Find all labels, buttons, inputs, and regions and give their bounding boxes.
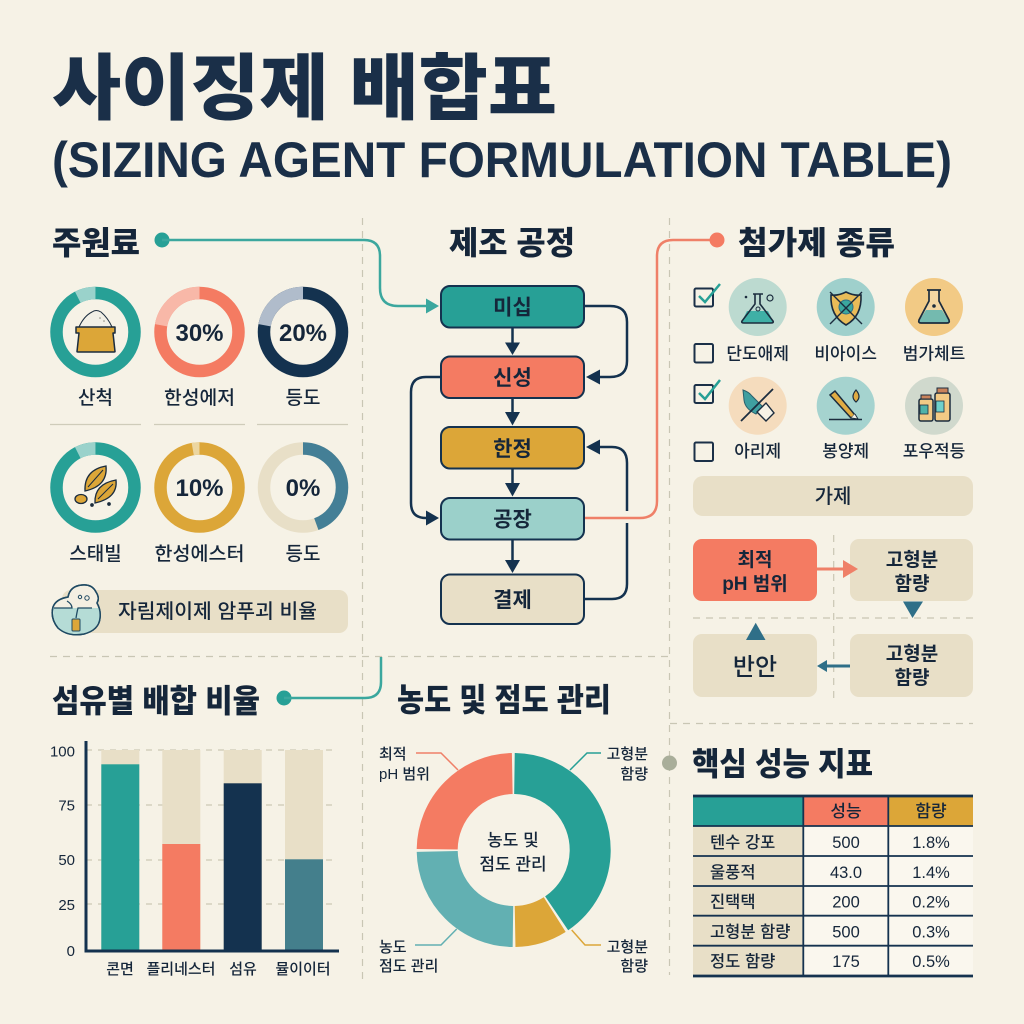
box: solids content bottom (850, 634, 973, 697)
row: solids content: 고형분 함량 (710, 922, 790, 942)
bar: polymer (285, 750, 323, 950)
donut: starch with leaf icon: 스태빌 (69, 543, 122, 565)
checkboxes (694, 284, 720, 461)
bar chart: blend ratio (50, 741, 339, 978)
labels: additive row one: 비아이스 (814, 344, 877, 364)
flow arrowheads (426, 342, 600, 573)
donut chart: concentration and viscosity (379, 745, 648, 975)
callout: self-emulsifier ratio: 자림제이제 암푸괴 비율 (118, 600, 317, 623)
table header (830, 802, 947, 821)
row: solids content: 0.3% (912, 924, 950, 942)
table: key performance (693, 796, 973, 976)
callout: self-emulsifier ratio (52, 585, 348, 635)
row: gloss (710, 892, 950, 912)
row: coverage: 1.4% (912, 864, 950, 882)
donut: 0 percent: 등도 (286, 544, 320, 565)
bar: polyester (162, 750, 200, 950)
label: optimal pH: pH 범위 (379, 766, 430, 783)
step: sinseong (441, 356, 584, 398)
x axis labels: 플리네스터 (146, 961, 216, 978)
row: gloss: 200 (832, 894, 860, 912)
box: reaction: 반안 (733, 654, 777, 681)
row: tensile strength: 500 (832, 834, 860, 852)
row: tensile strength: 텐수 강포 (710, 833, 775, 852)
step: hanjeong: 한정 (493, 438, 532, 461)
arrow: pH to solids (817, 560, 858, 578)
arrow: up (746, 623, 766, 640)
x axis labels (106, 961, 331, 978)
y axis labels: 50 (58, 852, 75, 869)
row: tensile strength: 1.8% (912, 834, 950, 852)
step: hanjeong (441, 427, 584, 468)
icon: bottles (905, 377, 963, 435)
connector: process to additives (585, 232, 724, 518)
row: tensile strength (710, 833, 950, 852)
title: 사이징제 배합표 (52, 50, 557, 130)
connector: blend chart to viscosity (276, 657, 381, 706)
row: solids content (710, 922, 950, 942)
row: viscosity content: 정도 함량 (710, 952, 775, 971)
label: concentration (379, 939, 438, 975)
x axis labels: 뮬이이터 (275, 961, 331, 978)
label: solids top: 함량 (620, 766, 648, 783)
label: optimal pH: 최적 (379, 746, 407, 763)
labels: additive row one (726, 344, 965, 364)
table header: 성능 (830, 802, 862, 821)
donut: 10 percent (154, 442, 245, 565)
donut center label: 농도 및 (487, 831, 539, 850)
donut: 10 percent: 10% (175, 475, 224, 502)
icon: shield with crossed germ (817, 278, 875, 336)
step: gyeolje (441, 574, 584, 624)
connector dot (662, 756, 677, 770)
donut center label: 점도 관리 (479, 855, 547, 874)
heading: manufacturing process: 제조 공정 (449, 225, 575, 261)
x axis labels: 콘면 (106, 961, 134, 978)
donut center label (479, 831, 547, 874)
row: coverage (710, 863, 950, 882)
table header: 함량 (915, 802, 947, 821)
step: misip (441, 286, 584, 328)
y axis labels: 100 (50, 744, 75, 760)
labels: additive row two (734, 442, 965, 461)
y axis labels (50, 744, 75, 960)
label: solids bottom (607, 939, 648, 975)
label: concentration: 점도 관리 (379, 958, 438, 975)
row: gloss: 0.2% (912, 894, 950, 912)
donut: 20 percent: 20% (279, 320, 327, 347)
box: reaction (693, 634, 817, 697)
bar: fiber (224, 750, 262, 950)
icon: flask on orange (905, 278, 963, 336)
row: solids content: 500 (832, 924, 860, 942)
label: solids top (607, 746, 648, 783)
donut: sancheok with sack icon: 산척 (78, 387, 113, 409)
box: solids content top: 함량 (895, 573, 929, 595)
flowchart: process (411, 286, 627, 624)
box: optimal pH range: pH 범위 (722, 573, 788, 595)
row: coverage: 43.0 (830, 864, 862, 882)
labels: additive row two: 아리제 (734, 442, 781, 461)
donut: 10 percent: 한성에스터 (154, 543, 244, 565)
donut: 0 percent (264, 448, 342, 565)
icon: brush and drop (817, 377, 875, 435)
box: solids content bottom: 함량 (895, 667, 929, 689)
y axis labels: 75 (58, 798, 75, 814)
step: sinseong: 신성 (493, 367, 532, 390)
label: concentration: 농도 (379, 939, 407, 956)
y axis labels: 0 (67, 943, 75, 960)
label: solids bottom: 함량 (620, 958, 648, 975)
box: solids content bottom: 고형분 (886, 643, 938, 665)
donut: starch with leaf icon (43, 435, 148, 565)
connector: main materials to process (154, 232, 439, 314)
step: gongjang: 공장 (493, 508, 532, 532)
box: solids content top (850, 539, 973, 601)
donut: sancheok with sack icon (43, 280, 148, 409)
title: (SIZING AGENT FORMULATION TABLE) (52, 132, 952, 188)
icon: emulsifier blob (52, 585, 100, 635)
icon: sack (76, 310, 115, 352)
icon: crossed pump (729, 377, 787, 435)
row: viscosity content (710, 952, 950, 971)
donut: 30 percent: 30% (175, 320, 224, 347)
label: solids top: 고형분 (607, 746, 648, 763)
labels: additive row one: 범가체트 (903, 344, 965, 364)
title (52, 50, 952, 188)
heading: additive types: 첨가제 종류 (738, 225, 895, 261)
labels: additive row one: 단도애제 (726, 344, 789, 364)
box: solids content top: 고형분 (886, 549, 938, 571)
panel: gaje (693, 476, 973, 516)
step: misip: 미십 (493, 296, 532, 320)
label: solids bottom: 고형분 (607, 939, 648, 956)
row: viscosity content: 175 (832, 953, 860, 971)
heading: blend ratio by fiber: 섬유별 배합 비율 (52, 683, 260, 719)
bar: cotton (101, 750, 139, 950)
arrow: down (903, 602, 923, 618)
donut: 20 percent (258, 287, 348, 409)
icon: flask with bubbles (729, 278, 787, 336)
labels: additive row two: 봉양제 (822, 442, 869, 461)
row: gloss: 진택택 (710, 892, 756, 912)
donut: 30 percent (154, 287, 245, 409)
icon: grain leaves (75, 466, 116, 506)
step: gyeolje: 결제 (493, 589, 532, 612)
donut: 20 percent: 등도 (286, 388, 320, 409)
x axis labels: 섬유 (229, 961, 257, 978)
panel: gaje: 가제 (815, 485, 851, 508)
row: coverage: 울풍적 (710, 863, 756, 882)
box: optimal pH range: 최적 (738, 549, 772, 571)
heading: key performance indicators: 핵심 성능 지표 (692, 746, 873, 782)
label: optimal pH (379, 746, 430, 783)
donut: 0 percent: 0% (286, 475, 320, 502)
heading: concentration and viscosity: 농도 및 점도 관리 (397, 682, 611, 718)
labels: additive row two: 포우적등 (903, 442, 965, 461)
row: viscosity content: 0.5% (912, 953, 950, 971)
step: gongjang (441, 498, 584, 540)
flow connectors (411, 306, 627, 599)
box: optimal pH range (693, 539, 817, 601)
donut: 30 percent: 한성에저 (164, 387, 235, 409)
leader lines (415, 753, 601, 945)
heading: main materials: 주원료 (52, 225, 140, 261)
y axis labels: 25 (58, 897, 75, 914)
arrow: left (817, 660, 850, 672)
